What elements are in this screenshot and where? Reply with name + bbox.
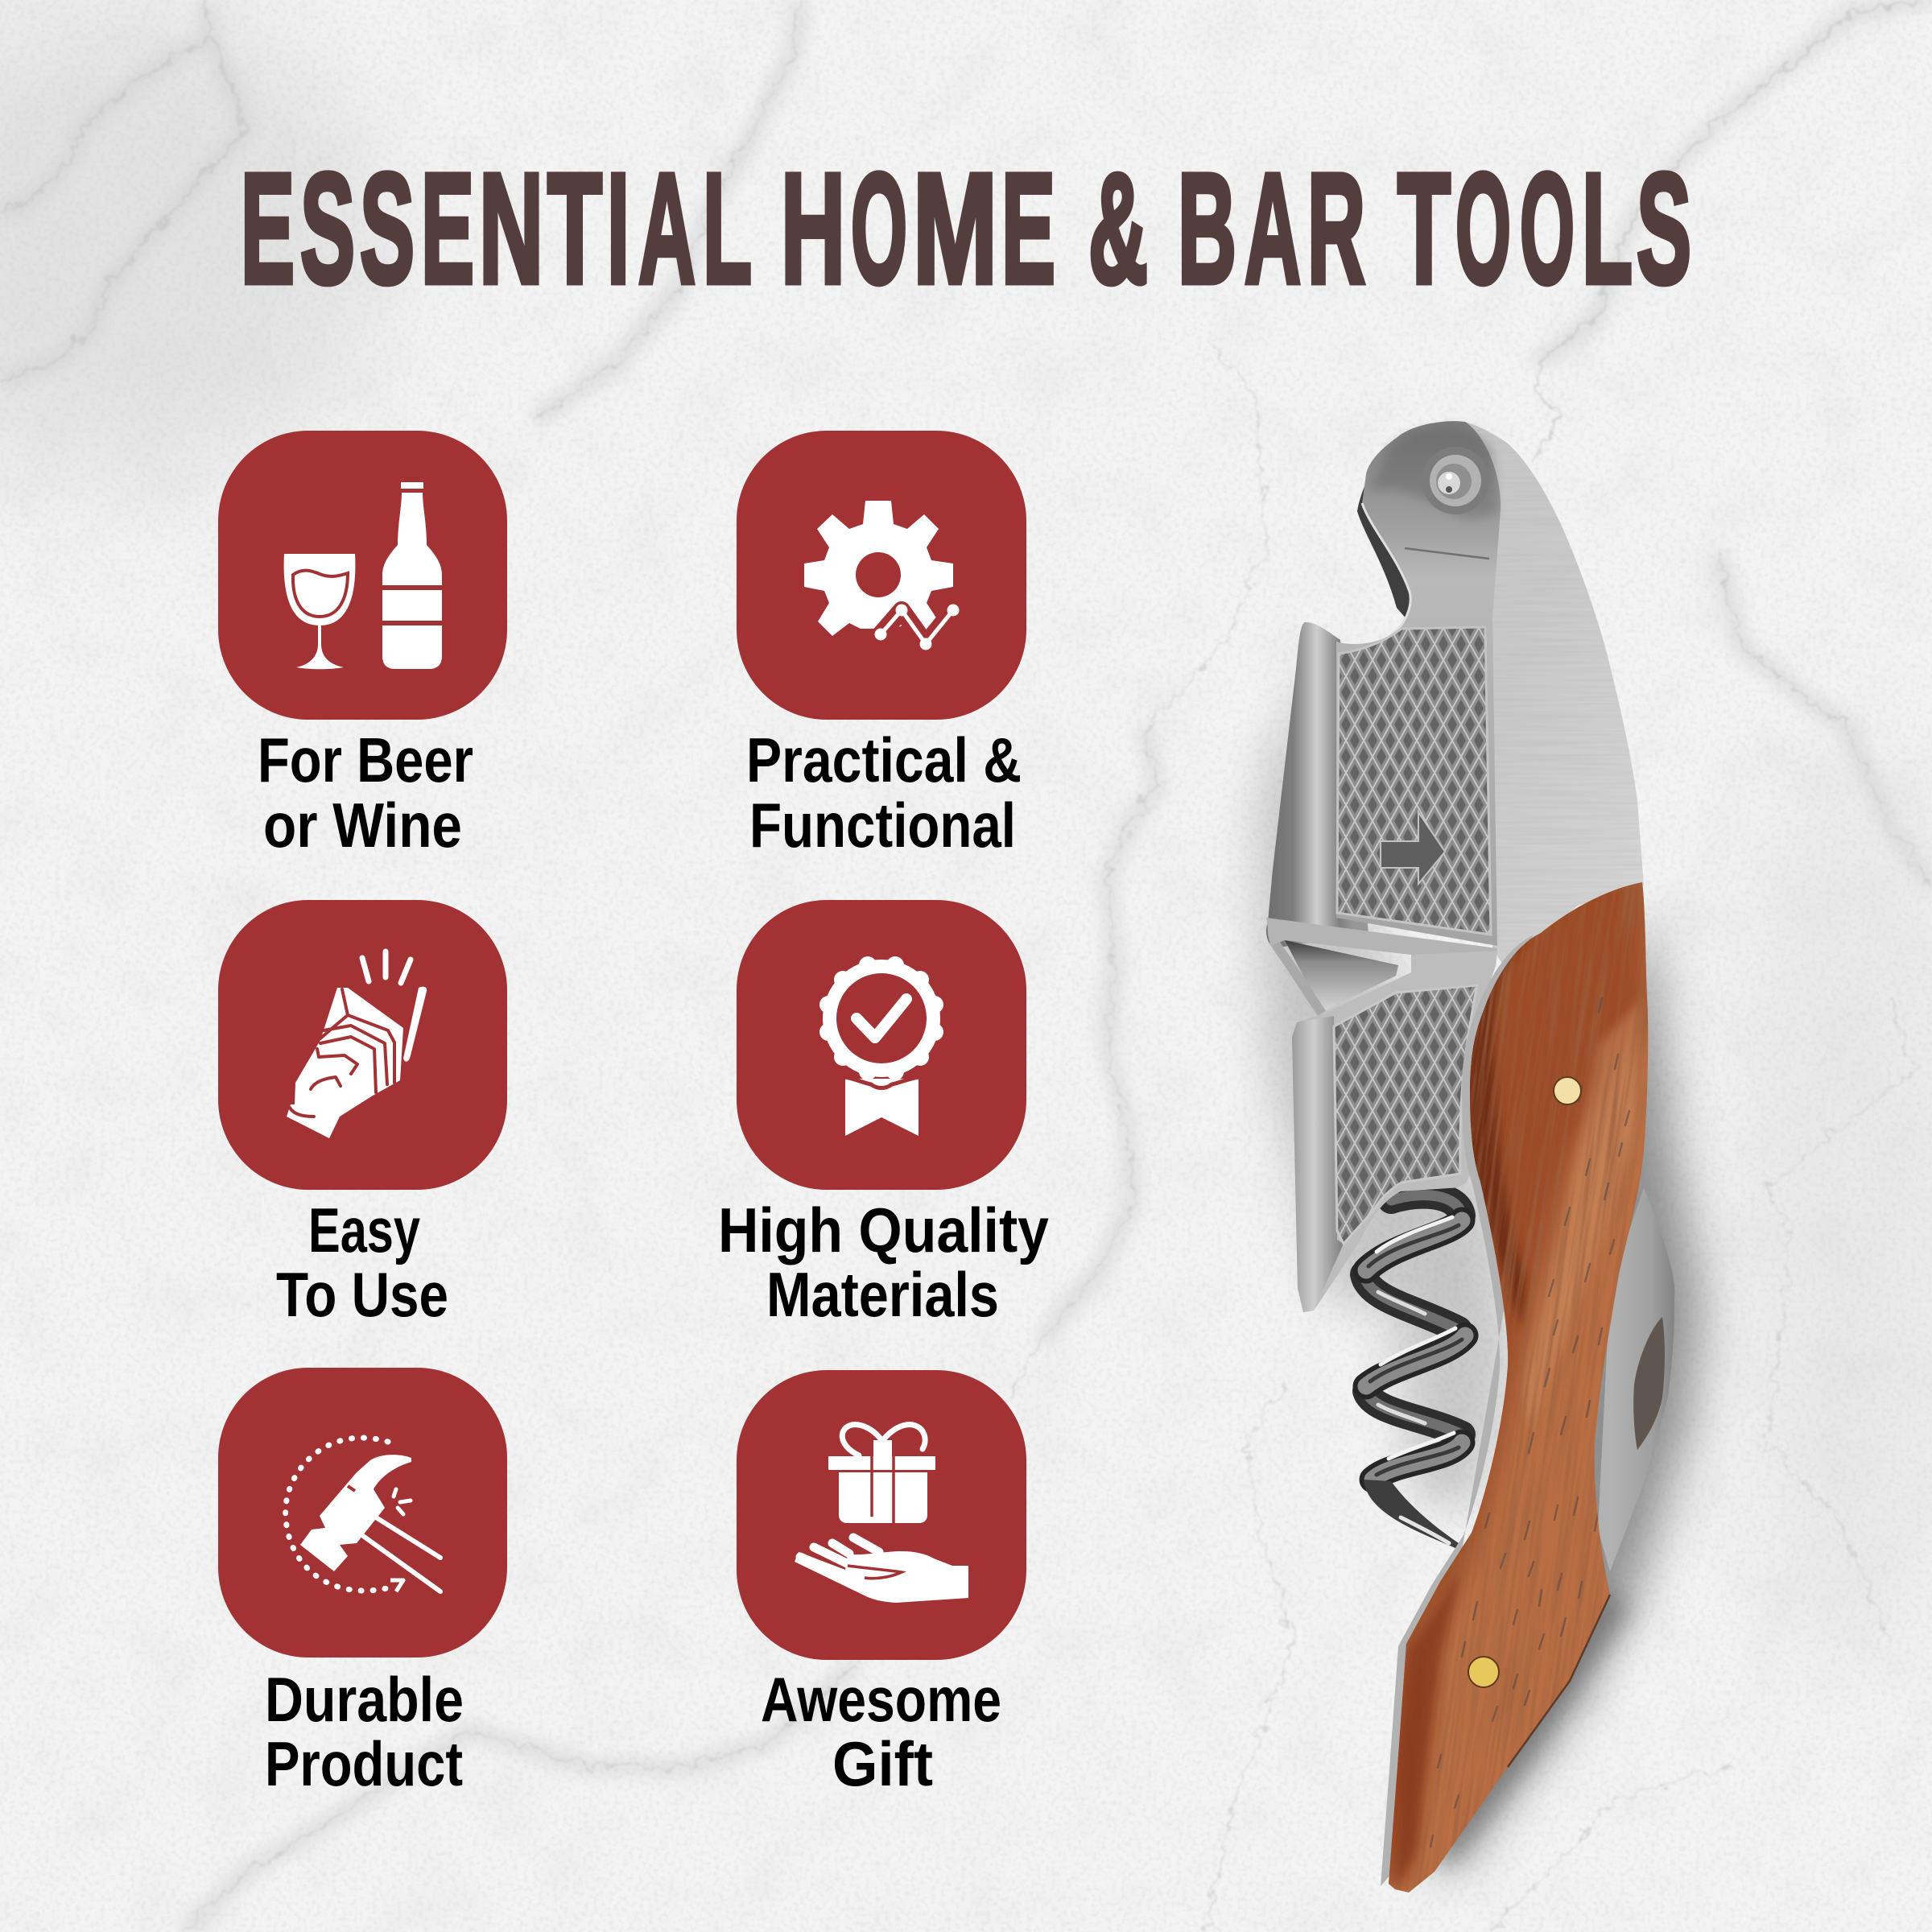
feature: durable product (218, 1368, 507, 1799)
tile (218, 431, 507, 720)
title: N (479, 141, 543, 316)
label: High Quality (718, 1195, 1049, 1265)
feature: for beer or wine (218, 431, 507, 861)
cast shadow (1256, 644, 1703, 1876)
lower steel plate (1266, 918, 1497, 1312)
label (276, 1195, 448, 1330)
feature: high quality materials (718, 900, 1049, 1330)
tile (218, 900, 507, 1190)
brass pin lower (1468, 1657, 1499, 1687)
title: H (781, 141, 845, 316)
title (241, 141, 1691, 316)
feature: awesome gift (737, 1370, 1026, 1799)
main blade (1465, 422, 1644, 963)
title: I (607, 141, 630, 316)
label: Product (265, 1728, 463, 1799)
tile (737, 900, 1026, 1190)
title: E (421, 141, 474, 316)
label (265, 1664, 464, 1799)
feature: easy to use (218, 900, 507, 1330)
upper knurled grip with arrow (1337, 627, 1491, 935)
title: O (851, 141, 907, 316)
icon: hammer with dotted swing arc (286, 1438, 440, 1591)
window between steel plates (1285, 940, 1398, 1012)
title: L (1582, 141, 1633, 316)
title: R (1307, 141, 1365, 316)
icon: quality badge with ribbon (819, 956, 943, 1136)
title: A (1245, 141, 1301, 316)
label: To Use (276, 1259, 448, 1330)
title: E (241, 141, 295, 316)
tile (737, 431, 1026, 720)
title: B (1178, 141, 1236, 316)
icon: snapping hand (287, 952, 427, 1138)
icon: gift over open hand (795, 1425, 968, 1603)
title: M (913, 141, 997, 316)
title: S (300, 141, 355, 316)
label: Practical & (746, 724, 1022, 795)
title: A (638, 141, 696, 316)
icon: wine glass and bottle (284, 482, 443, 669)
label (761, 1664, 1001, 1799)
rivet (1422, 447, 1489, 514)
title: E (1001, 141, 1055, 316)
product: waiter's corkscrew (1236, 421, 1732, 1893)
title: & (1088, 141, 1148, 316)
label: Awesome (761, 1664, 1001, 1735)
label: Easy (308, 1195, 420, 1265)
feature: practical and functional (737, 431, 1026, 861)
label: or Wine (263, 790, 462, 861)
title: T (1397, 141, 1451, 316)
label: Gift (832, 1728, 933, 1799)
label: Functional (749, 790, 1016, 861)
icon: gear with chart line (804, 501, 960, 650)
title: O (1520, 141, 1575, 316)
tile (737, 1370, 1026, 1660)
label: For Beer (258, 724, 473, 795)
label (718, 1195, 1049, 1330)
label (746, 724, 1022, 861)
upper steel plate with bottle opener head (1266, 421, 1501, 948)
rear blade with oval cutout (1598, 1187, 1674, 1571)
tile (218, 1368, 507, 1657)
title: O (1455, 141, 1511, 316)
wood handle with steel liner (1381, 882, 1649, 1893)
label: Materials (766, 1259, 999, 1330)
label: Durable (265, 1664, 464, 1735)
title: S (1637, 141, 1691, 316)
title: T (547, 141, 602, 316)
brass pin upper (1554, 1077, 1581, 1104)
corkscrew worm (1364, 1195, 1465, 1549)
label (258, 724, 473, 861)
title: L (703, 141, 752, 316)
title: S (360, 141, 415, 316)
